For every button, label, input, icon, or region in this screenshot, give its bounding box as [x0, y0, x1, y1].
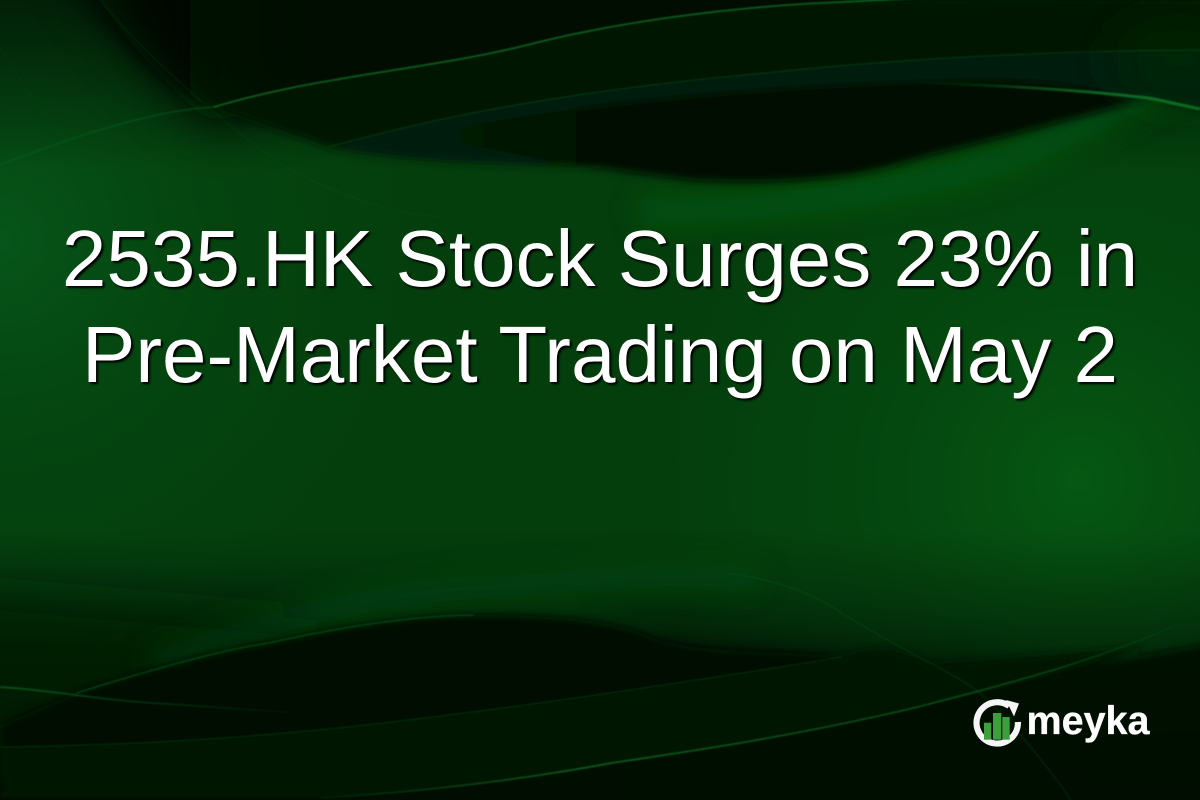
icon: ring with bar chart and arrow: [973, 699, 1021, 747]
title: [62, 214, 1138, 402]
logo: meyka: [973, 699, 1150, 747]
title: Pre-Market Trading on May 2: [82, 310, 1118, 399]
title: 2535.HK Stock Surges 23% in: [62, 214, 1138, 303]
wordmark: meyka: [1026, 699, 1150, 743]
